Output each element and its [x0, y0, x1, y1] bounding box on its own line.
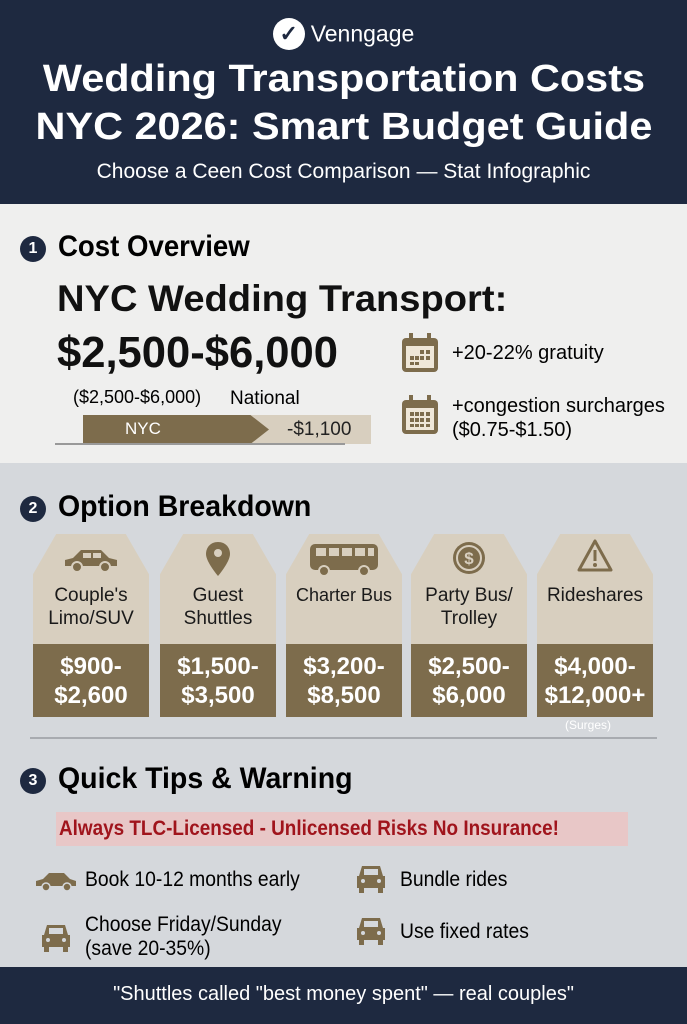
- subtitle: Choose a Ceen Cost Comparison — Stat Infographic: [97, 160, 590, 183]
- card: charter bus: [286, 534, 402, 717]
- warning banner: Always TLC-Licensed - Unlicensed Risks No Insurance!: [59, 817, 559, 840]
- header: [0, 0, 687, 204]
- card: limo: Couple's: [54, 585, 128, 606]
- card: party bus: Trolley: [441, 608, 497, 629]
- card: limo: [33, 534, 149, 717]
- icon: calendar gratuity: [402, 333, 604, 372]
- tip: friday sunday: Choose Friday/Sunday: [85, 913, 282, 936]
- title: Wedding Transportation Costs: [42, 58, 645, 100]
- title: NYC 2026: Smart Budget Guide: [35, 106, 652, 148]
- card: rideshares: $12,000+: [545, 682, 645, 709]
- big stat: NYC Wedding Transport:: [57, 278, 507, 319]
- logo: [273, 18, 414, 50]
- heading 3: 3: [29, 772, 37, 789]
- card: shuttles: $1,500-: [177, 653, 259, 680]
- footer quote: [0, 967, 687, 1024]
- title: [35, 58, 652, 148]
- tip: fixed rates: Use fixed rates: [400, 920, 529, 943]
- card: party bus: $2,500-: [428, 653, 510, 680]
- cards: option breakdown: [33, 534, 653, 732]
- card: shuttles: Shuttles: [184, 608, 252, 629]
- heading 3: Quick Tips & Warning: [58, 762, 353, 795]
- icon: calendar gratuity: +20-22% gratuity: [452, 342, 604, 364]
- card: party bus: $6,000: [432, 682, 506, 709]
- tip: fixed rates: [357, 918, 529, 945]
- heading 1: Cost Overview: [58, 230, 250, 263]
- warning banner: [56, 812, 628, 846]
- heading 1: 1: [29, 240, 37, 257]
- note: surges: (Surges): [565, 718, 611, 732]
- icon: calendar congestion: [402, 395, 665, 441]
- tip: bundle rides: [357, 866, 507, 893]
- card: shuttles: [160, 534, 276, 717]
- comparison bar: National: [230, 388, 300, 409]
- heading 2: Option Breakdown: [58, 490, 311, 523]
- icon: calendar congestion: +congestion surcharges: [452, 395, 665, 417]
- tip: friday sunday: [42, 913, 282, 960]
- logo: Venngage: [311, 20, 414, 46]
- tip: book early: Book 10-12 months early: [85, 868, 300, 891]
- card: shuttles: Guest: [193, 585, 243, 606]
- card: charter bus: Charter Bus: [296, 585, 392, 605]
- card: shuttles: $3,500: [181, 682, 255, 709]
- icon: calendar congestion: ($0.75-$1.50): [452, 419, 572, 441]
- comparison bar: -$1,100: [287, 419, 351, 440]
- card: rideshares: Rideshares: [547, 585, 643, 606]
- comparison bar: [55, 387, 371, 445]
- tip: friday sunday: (save 20-35%): [85, 937, 211, 960]
- tip list: [36, 866, 529, 960]
- panel: cost overview: $2,500-$6,000: [57, 328, 338, 377]
- comparison bar: ($2,500-$6,000): [73, 387, 201, 407]
- card: charter bus: $3,200-: [303, 653, 385, 680]
- card: party bus: $: [464, 549, 474, 568]
- card: rideshares: [537, 534, 653, 717]
- card: party bus: [411, 534, 527, 717]
- footer quote: "Shuttles called "best money spent" — real couples": [113, 983, 574, 1005]
- tip: bundle rides: Bundle rides: [400, 868, 507, 891]
- logo: ✓: [279, 21, 298, 46]
- card: limo: $2,600: [54, 682, 128, 709]
- card: limo: $900-: [60, 653, 122, 680]
- card: rideshares: $4,000-: [554, 653, 636, 680]
- heading 2: 2: [29, 500, 37, 517]
- card: party bus: Party Bus/: [425, 585, 513, 606]
- panel: cost overview: [0, 204, 687, 463]
- card: limo: Limo/SUV: [48, 608, 134, 629]
- comparison bar: NYC: [125, 419, 161, 438]
- card: charter bus: $8,500: [307, 682, 381, 709]
